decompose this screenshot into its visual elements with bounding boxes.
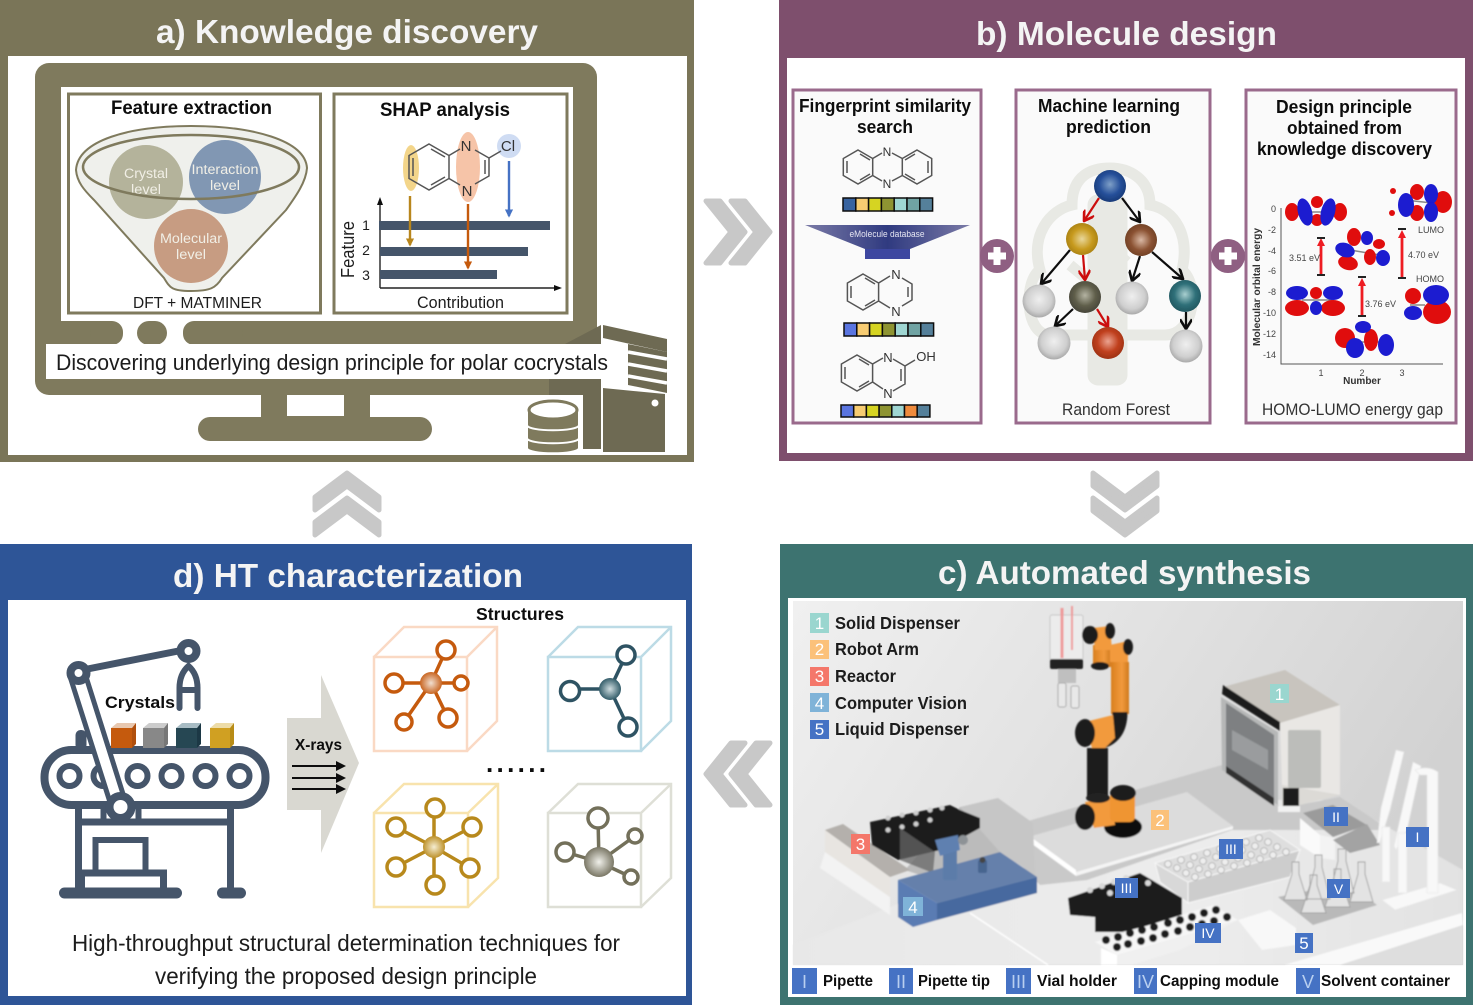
tree nodes (1022, 170, 1202, 362)
molecular orbital energy chart: -10 (1263, 308, 1276, 318)
vial holder (1155, 830, 1300, 903)
column (1087, 748, 1108, 798)
bottom legend: components: Pipette (823, 973, 873, 990)
scene markers: V (1334, 881, 1344, 897)
scene markers: I (1416, 829, 1419, 845)
crystal cubes (111, 723, 234, 748)
chloroquinoxaline molecule (409, 138, 515, 200)
bottom legend: components: I (802, 972, 807, 992)
heading design principle: obtained from (1287, 118, 1402, 138)
arrow: a to b (706, 201, 770, 263)
heading a: a) Knowledge discovery (156, 13, 539, 50)
molecular orbital energy chart (1252, 204, 1444, 387)
arrow: c to d (706, 743, 770, 805)
atom labels: N (462, 183, 472, 200)
molecular level circle: level (176, 247, 206, 262)
SHAP bar chart: Feature (338, 221, 358, 278)
molecular level circle: Molecular (160, 231, 223, 246)
crystal structure yellow (374, 784, 498, 907)
top legend: modules: 3 (815, 667, 824, 686)
molecular orbital energy chart: 3.76 eV (1365, 299, 1396, 309)
molecular orbital energy chart: LUMO (1418, 225, 1444, 235)
molecular orbital energy chart: 2 (1359, 368, 1365, 378)
eMolecule database funnel: eMolecule database (850, 229, 924, 239)
conveyor wheels (60, 766, 250, 786)
fingerprint bar 1 (843, 198, 933, 211)
hydroxyquinoxaline molecule: N (883, 386, 893, 401)
hydroxyquinoxaline molecule: OH (916, 349, 936, 364)
feature extraction panel (68, 94, 320, 313)
top legend: modules: 2 (815, 640, 824, 659)
bottom legend: components: Solvent container (1321, 973, 1450, 990)
heading design principle (1257, 97, 1432, 159)
heading feature extraction: Feature extraction (111, 98, 272, 119)
bottom legend: components: II (896, 972, 906, 992)
tree edges (1041, 198, 1186, 329)
crystal level circle (109, 145, 183, 219)
heading fingerprint: search (857, 117, 913, 137)
molecular orbital energy chart: -6 (1268, 266, 1276, 276)
molecular orbital energy chart: -2 (1268, 225, 1276, 235)
molecular orbital energy chart: Number (1343, 376, 1381, 387)
hydroxyquinoxaline molecule: N (883, 350, 893, 365)
arrow: nitrogen to feature 3 (467, 204, 469, 268)
design principle panel (1246, 90, 1456, 423)
computer vision box (898, 835, 1037, 927)
heading SHAP analysis: SHAP analysis (380, 100, 510, 121)
molecular orbital energy chart: 4.70 eV (1408, 250, 1439, 260)
quinoxaline molecule (847, 267, 912, 319)
phenazine molecule: N (883, 145, 891, 159)
SHAP bar chart: 2 (362, 242, 370, 258)
molecular orbital energy chart: Molecular orbital energy (1252, 228, 1263, 346)
top legend: modules: Solid Dispenser (835, 613, 960, 633)
banner text background (46, 344, 601, 379)
scene markers: 4 (908, 898, 918, 917)
molecular orbital energy chart: 3 (1399, 368, 1405, 378)
phenazine molecule: N (883, 177, 891, 191)
banner caption: Discovering underlying design principle for polar cocrystals (56, 350, 608, 375)
fingerprint similarity search panel (793, 90, 981, 423)
atom labels: N (461, 138, 471, 155)
eMolecule database funnel (805, 225, 970, 259)
ellipsis dots: ...... (486, 748, 546, 778)
SHAP bar chart (338, 197, 562, 312)
robot conveyor icon (44, 643, 266, 893)
pipette stand (1377, 750, 1457, 910)
machine learning prediction panel (1016, 90, 1210, 423)
molecular level circle (154, 209, 228, 283)
molecule highlights (403, 132, 521, 202)
molecular orbital energy chart: -8 (1268, 287, 1276, 297)
scene markers: 5 (1299, 934, 1309, 953)
gripper (180, 666, 198, 708)
scene markers: II (1332, 809, 1340, 825)
structures label: Structures (476, 604, 564, 624)
molecular orbital energy chart: -12 (1263, 329, 1276, 339)
heading fingerprint (799, 96, 971, 137)
crystal level circle: level (131, 182, 161, 197)
DFT + MATMINER label: DFT + MATMINER (133, 295, 262, 312)
upper link (1111, 662, 1129, 714)
SHAP bar chart: 3 (362, 267, 370, 283)
molecular orbital energy chart: -14 (1263, 350, 1276, 360)
fingerprint bar 3 (841, 405, 930, 417)
bottom legend: components: III (1011, 972, 1026, 992)
computer monitor (35, 63, 597, 441)
top legend: modules: 5 (815, 720, 824, 739)
heading d: d) HT characterization (173, 557, 523, 594)
SHAP analysis panel (334, 94, 567, 313)
molecular orbital energy chart: -4 (1268, 246, 1276, 256)
computer tower and database icon (527, 325, 667, 453)
phenazine molecule (843, 145, 932, 191)
plus icon 2 (1211, 239, 1245, 273)
interaction level circle (189, 140, 261, 214)
random forest tree diagram (1022, 168, 1202, 380)
reactor block (820, 798, 1035, 915)
molecular orbital energy chart: 1 (1318, 368, 1324, 378)
molecular orbital energy chart: 0 (1271, 204, 1276, 214)
solid dispenser instrument (1221, 670, 1340, 812)
bottom legend: components: Vial holder (1037, 973, 1117, 990)
scene markers: 3 (856, 835, 865, 854)
arrow: benzene ring to feature 2 (409, 196, 411, 245)
crystals label: Crystals (105, 693, 175, 712)
robot arm links (70, 672, 126, 810)
crystal structure grey (548, 784, 671, 907)
top legend: modules: 1 (815, 614, 824, 633)
quinoxaline molecule: N (891, 267, 901, 282)
caption d (72, 930, 620, 989)
heading c: c) Automated synthesis (938, 554, 1311, 591)
top legend: modules (810, 613, 969, 739)
SHAP bar chart: Contribution (417, 293, 504, 312)
pipette tip racks (1300, 805, 1380, 860)
3D platform rendering (793, 601, 1463, 965)
tree silhouette (1029, 168, 1192, 380)
top legend: modules: Robot Arm (835, 639, 919, 659)
panel a: knowledge discovery (0, 0, 694, 462)
crystal level circle: Crystal (124, 166, 168, 181)
bottom legend: components: IV (1137, 972, 1154, 992)
crystal structure teal (548, 627, 671, 751)
heading machine learning: Machine learning (1038, 96, 1180, 116)
top legend: modules: Computer Vision (835, 693, 967, 713)
plus icon 1 (980, 239, 1014, 273)
crystal structure orange (374, 627, 497, 751)
solvent flasks (1278, 849, 1377, 925)
black rack (870, 805, 980, 860)
caption d: verifying the proposed design principle (155, 963, 537, 989)
heading fingerprint: Fingerprint similarity (799, 96, 971, 116)
capping module (1095, 905, 1296, 965)
scene markers: IV (1201, 925, 1215, 941)
top legend: modules: 4 (815, 694, 824, 713)
HOMO-LUMO label: HOMO-LUMO energy gap (1262, 401, 1443, 419)
bottom legend: components: Pipette tip (918, 973, 990, 990)
heading machine learning (1038, 96, 1180, 137)
panel b: molecule design (779, 0, 1473, 461)
quinoxaline molecule: N (891, 304, 901, 319)
bottom legend: components (792, 968, 1450, 994)
bottom legend: components: Capping module (1160, 973, 1279, 990)
molecular orbital energy chart: 3.51 eV (1289, 253, 1320, 263)
heading machine learning: prediction (1066, 117, 1151, 137)
panel c: automated synthesis (780, 544, 1473, 1005)
top legend: modules: Reactor (835, 666, 896, 686)
heading design principle: knowledge discovery (1257, 139, 1432, 159)
hydroxyquinoxaline molecule (841, 349, 936, 401)
heading design principle: Design principle (1276, 97, 1412, 117)
energy gap bars (1321, 238, 1402, 316)
orbital isosurfaces (1285, 184, 1452, 358)
fingerprint bar 2 (844, 323, 934, 336)
heading b: b) Molecule design (976, 15, 1277, 52)
top legend: modules: Liquid Dispenser (835, 719, 969, 739)
SHAP bar chart: 1 (362, 217, 370, 233)
scene markers: 1 (1275, 685, 1284, 704)
X-ray arrow: X-rays (295, 737, 342, 754)
scene markers: III (1121, 880, 1132, 896)
database cylinder (527, 401, 579, 453)
arrow: b to c (1093, 473, 1157, 535)
scene markers (851, 684, 1429, 953)
arrow: chlorine to feature 1 (508, 161, 510, 216)
molecular orbital energy chart: HOMO (1416, 274, 1444, 284)
scene markers: 2 (1155, 811, 1165, 830)
interaction level circle: level (210, 178, 240, 193)
scene markers: III (1225, 841, 1237, 857)
atom labels: Cl (501, 138, 515, 155)
X-ray arrow (287, 675, 359, 853)
panel d: HT characterization (0, 544, 692, 1005)
funnel (76, 126, 307, 291)
bottom legend: components: V (1302, 972, 1314, 992)
random forest label: Random Forest (1062, 401, 1170, 419)
robot arm (1050, 606, 1142, 838)
atom labels (461, 138, 515, 200)
interaction level circle: Interaction (192, 162, 258, 177)
black vial rack (1068, 873, 1182, 932)
arrow: d to a (315, 473, 379, 535)
bench surfaces (793, 765, 1463, 965)
caption d: High-throughput structural determination techniques for (72, 930, 620, 956)
